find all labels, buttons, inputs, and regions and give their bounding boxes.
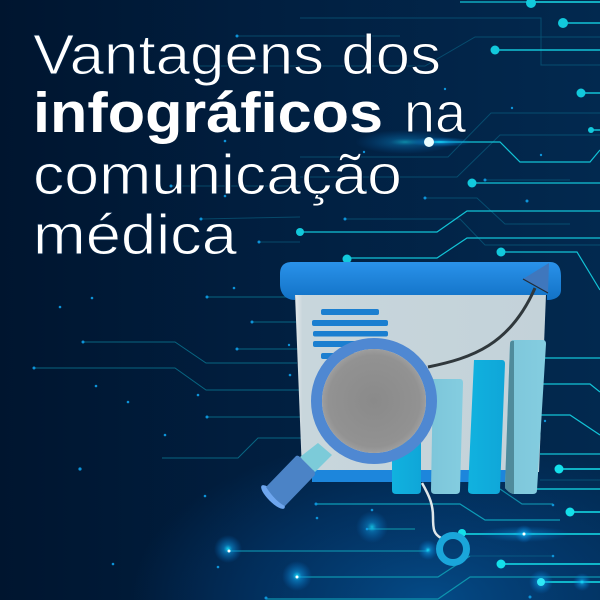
board sheet xyxy=(295,294,546,472)
handle xyxy=(300,443,332,472)
title xyxy=(33,23,466,267)
left circuit lines xyxy=(34,297,305,458)
dim circuit lines xyxy=(171,18,600,556)
magnifying glass xyxy=(258,344,432,512)
presentation board illustration xyxy=(258,262,561,562)
text lines on board xyxy=(312,309,388,359)
title: infográficos xyxy=(33,81,383,145)
bright circuit lines xyxy=(229,2,600,599)
pull ring xyxy=(440,536,466,562)
lens xyxy=(322,349,426,453)
ring xyxy=(316,344,432,458)
title: médica xyxy=(33,203,237,267)
roller xyxy=(280,262,561,300)
hanging cord xyxy=(422,483,441,538)
title: comunicação xyxy=(33,143,402,207)
title: Vantagens dos xyxy=(33,23,441,87)
growth arrow xyxy=(428,263,549,367)
bar chart xyxy=(392,340,546,494)
circuit nodes xyxy=(296,0,594,568)
board bottom bar xyxy=(312,470,520,482)
light glows xyxy=(214,130,591,594)
title: na xyxy=(404,81,466,145)
